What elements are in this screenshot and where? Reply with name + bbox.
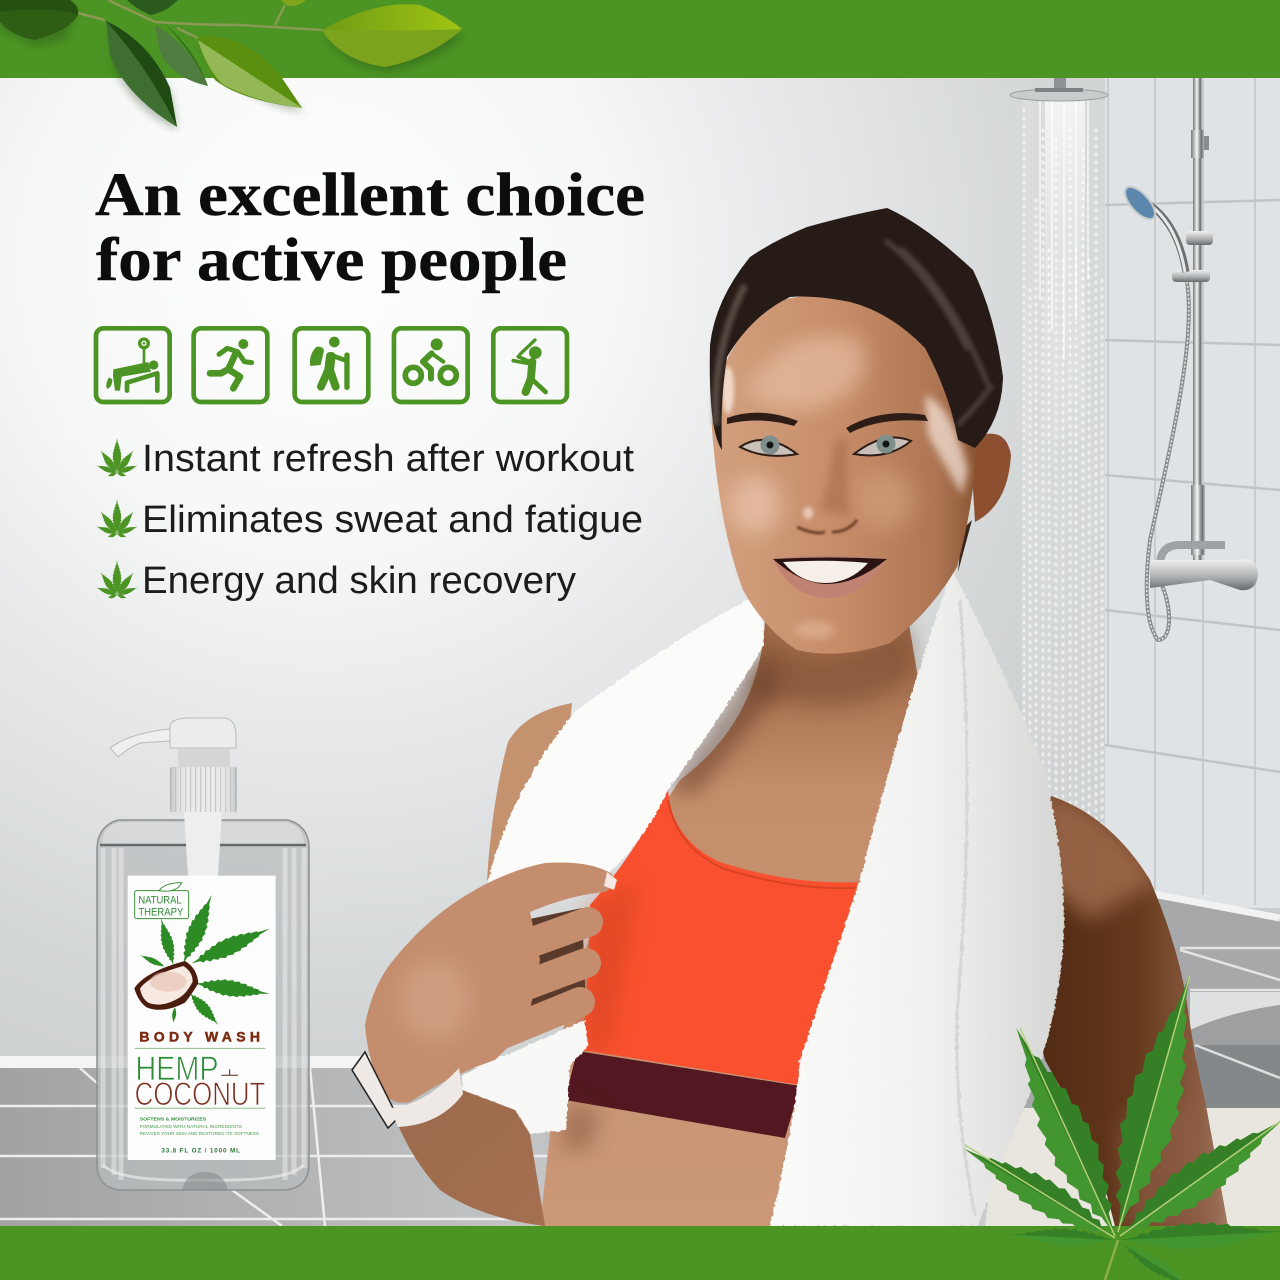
product label: FORMULATED WITH NATURAL INGREDIENTS bbox=[140, 1124, 243, 1130]
bra band bbox=[565, 1051, 800, 1138]
towel left side bbox=[487, 592, 764, 890]
title bbox=[95, 162, 645, 294]
ear bbox=[970, 434, 1011, 522]
shower head bbox=[1010, 78, 1108, 101]
icon: hemp bullet 1 bbox=[95, 438, 139, 478]
bra strap sliver bbox=[1000, 1062, 1030, 1118]
product label bbox=[128, 876, 276, 1160]
torso and neck bbox=[540, 600, 925, 1226]
icon: hiker bbox=[295, 328, 368, 402]
nose bbox=[797, 440, 857, 533]
product label: HEMP bbox=[135, 1050, 219, 1088]
shower wall tiles bbox=[1105, 78, 1280, 908]
mouth bbox=[773, 556, 887, 598]
neck shadow bbox=[745, 620, 915, 707]
label product text: BODY WASH bbox=[139, 1029, 260, 1045]
sports bra bbox=[582, 790, 858, 1085]
smartwatch bbox=[352, 1052, 463, 1128]
product label: REVIVES YOUR SKIN AND RESTORES ITS SOFTNESS bbox=[140, 1131, 260, 1137]
product label: 33.8 FL OZ / 1000 ML bbox=[161, 1148, 240, 1155]
shower rail and hand shower bbox=[1120, 78, 1258, 640]
forearm bbox=[395, 1090, 545, 1226]
hair behind neck bbox=[958, 520, 972, 572]
benefit 3: Energy and skin recovery bbox=[142, 560, 576, 602]
brand logo: NATURAL bbox=[138, 894, 182, 906]
leaf stem bbox=[1105, 1240, 1118, 1280]
product label: SOFTENS & MOISTURIZES bbox=[140, 1117, 207, 1123]
towel lower end bbox=[462, 1020, 588, 1134]
label coconut bbox=[134, 961, 198, 1010]
bottle body bbox=[97, 812, 309, 1190]
icon: cyclist bbox=[394, 328, 468, 402]
activity icons bbox=[96, 328, 567, 402]
title: An excellent choice bbox=[95, 162, 645, 229]
icon: runner bbox=[194, 328, 267, 402]
product label: COCONUT bbox=[135, 1075, 265, 1112]
brand logo bbox=[135, 883, 189, 919]
face highlights bbox=[722, 336, 968, 639]
benefit 1: Instant refresh after workout bbox=[142, 438, 634, 480]
shower water stream bbox=[1022, 100, 1105, 830]
hemp coconut bottle bbox=[97, 718, 309, 1190]
benefit 2: Eliminates sweat and fatigue bbox=[142, 499, 643, 541]
leaf shadows bbox=[0, 8, 465, 130]
bottle base bbox=[182, 1172, 228, 1190]
towel right side bbox=[770, 570, 1064, 1226]
icon: hemp bullet 3 bbox=[95, 560, 139, 600]
benefit list bbox=[95, 438, 643, 602]
top-left leaves bbox=[0, 0, 465, 130]
face bbox=[712, 295, 977, 654]
bottom green band bbox=[0, 1226, 1280, 1280]
bottle pump bbox=[110, 718, 237, 812]
top green band bbox=[0, 0, 1280, 78]
woman bbox=[352, 208, 1230, 1230]
icon: bench press bbox=[96, 328, 170, 402]
shadow under band bbox=[560, 1102, 600, 1150]
icon: hemp bullet 2 bbox=[95, 499, 139, 539]
floor left bbox=[0, 1056, 560, 1226]
eyebrows bbox=[727, 413, 928, 433]
label hemp leaf bbox=[139, 892, 274, 1029]
eyes bbox=[740, 434, 911, 456]
left shoulder bbox=[487, 703, 572, 880]
title: for active people bbox=[96, 227, 567, 294]
floor right bbox=[985, 885, 1280, 1226]
twigs bbox=[78, 0, 322, 38]
hemp leaf bottom right bbox=[956, 968, 1280, 1280]
shadow beside towel bbox=[668, 650, 780, 795]
icon: baseball batter bbox=[493, 328, 567, 402]
brand logo: THERAPY bbox=[138, 906, 183, 918]
hair bbox=[710, 208, 1003, 450]
right arm bbox=[1043, 796, 1228, 1226]
towel bbox=[462, 570, 1064, 1226]
hand bbox=[365, 862, 617, 1103]
